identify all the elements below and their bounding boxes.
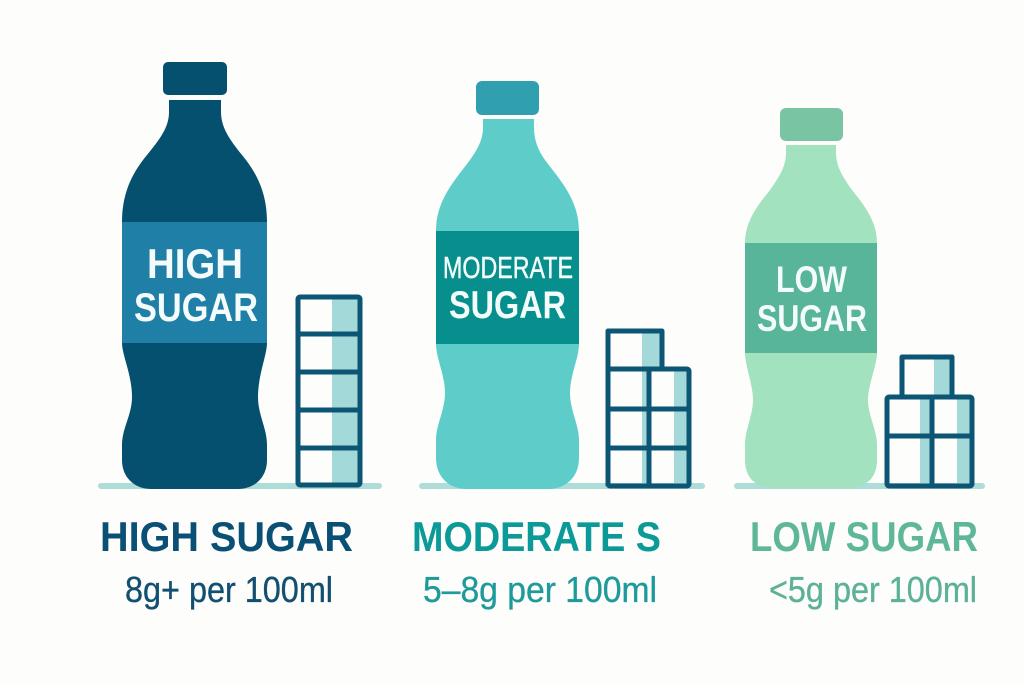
sugar cubes: five cubes bbox=[298, 297, 360, 485]
bottle: moderate sugar bbox=[436, 81, 579, 489]
bottle label bbox=[436, 231, 579, 344]
panel: moderate sugar bbox=[412, 81, 705, 610]
label text: SUGAR bbox=[449, 284, 566, 327]
range: 5–8g per 100ml: 5–8g per 100ml bbox=[423, 569, 657, 610]
panel: low sugar bbox=[734, 108, 985, 610]
bottle body bbox=[122, 100, 267, 489]
bottle cap bbox=[476, 81, 539, 115]
label text bbox=[757, 259, 867, 339]
label text: HIGH bbox=[147, 240, 243, 287]
sugar cubes: five cubes bbox=[887, 357, 972, 486]
bottle label bbox=[745, 243, 877, 353]
label text: LOW bbox=[776, 259, 847, 300]
label text bbox=[443, 250, 573, 327]
sugar cubes: seven cubes bbox=[608, 331, 689, 486]
label text: SUGAR bbox=[757, 298, 867, 339]
shelf line: low sugar bbox=[734, 483, 985, 489]
heading: low sugar: LOW SUGAR bbox=[750, 513, 978, 560]
label text: SUGAR bbox=[134, 286, 258, 330]
shelf line: moderate sugar bbox=[419, 483, 705, 489]
bottle: low sugar bbox=[745, 108, 877, 488]
range: <5g per 100ml: <5g per 100ml bbox=[769, 569, 977, 610]
label text bbox=[134, 240, 258, 330]
heading: high sugar: HIGH SUGAR bbox=[100, 513, 353, 560]
shelf line: high sugar bbox=[98, 483, 382, 489]
heading: moderate sugar, cut off: MODERATE S bbox=[412, 513, 661, 560]
bottle cap bbox=[163, 62, 227, 95]
bottle body bbox=[745, 145, 877, 488]
range: 8g+ per 100ml: 8g+ per 100ml bbox=[125, 569, 333, 610]
bottle: high sugar bbox=[122, 62, 267, 489]
label text: MODERATE bbox=[443, 250, 573, 285]
bottle body bbox=[436, 119, 579, 489]
bottle label bbox=[122, 222, 267, 343]
bottle cap bbox=[780, 108, 843, 141]
panel: high sugar bbox=[98, 62, 382, 610]
